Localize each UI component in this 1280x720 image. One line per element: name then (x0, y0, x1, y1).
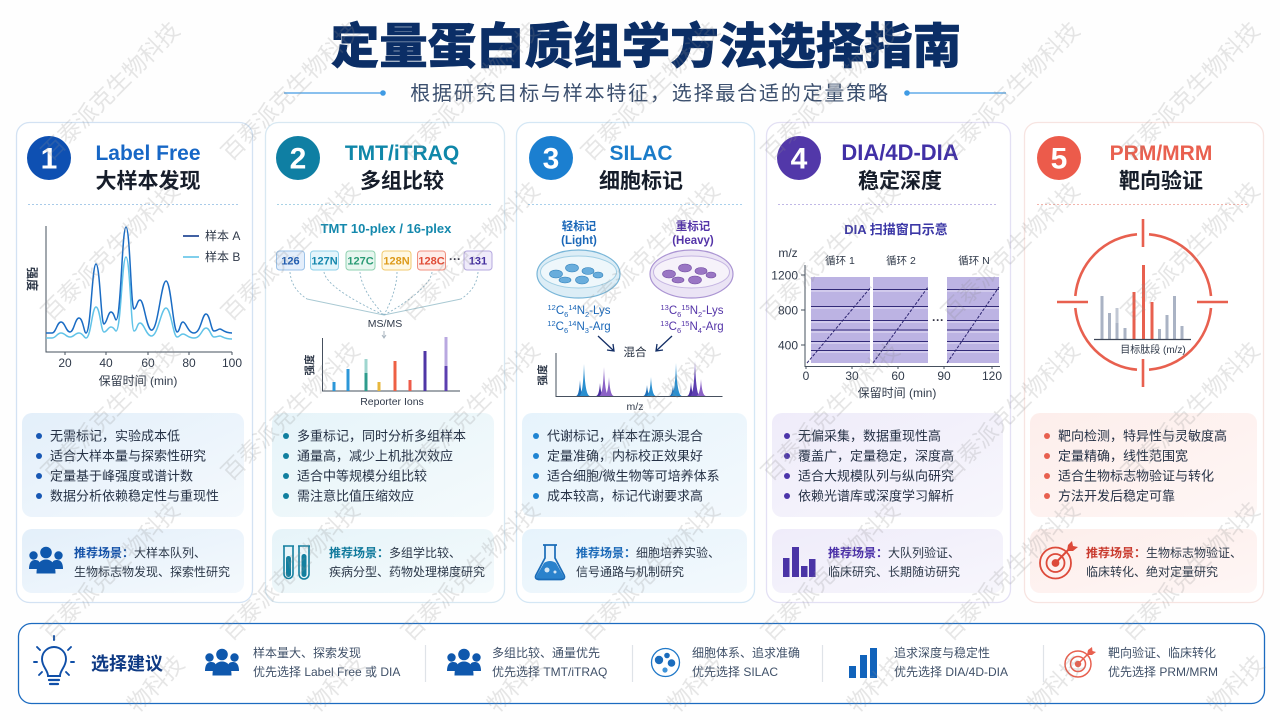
bullet list: 适合大规模队列与纵向研究 (798, 468, 954, 484)
recommended scenarios: 推荐场景：大样本队列、 (74, 545, 206, 560)
recommended scenarios (272, 529, 494, 593)
bullet list: 定量基于峰强度或谱计数 (50, 468, 193, 484)
bullet list: 无偏采集，数据重现性高 (798, 428, 941, 444)
diagram: TMT reporter channels: ··· (449, 252, 461, 266)
icon: target (1040, 541, 1078, 578)
chart: chromatogram (25, 226, 242, 388)
number badge 1 (27, 136, 71, 180)
chart: DIA scan windows: 循环 N (958, 254, 990, 267)
method focus: 稳定深度 (858, 169, 942, 193)
recommended scenarios: 推荐场景：多组学比较、 (329, 545, 461, 560)
chart: DIA scan windows: 循环 1 (825, 254, 855, 267)
advice 1 (205, 645, 400, 679)
panel: Label Free (16, 122, 252, 602)
bullet list: 数据分析依赖稳定性与重现性 (50, 488, 219, 504)
chart: DIA scan windows: 60 (891, 369, 905, 383)
advice 3: 细胞体系、追求准确 (692, 645, 800, 660)
bullet list: 无需标记，实验成本低 (50, 428, 180, 444)
diagram: SILAC labeling: 6 (564, 326, 568, 335)
diagram: SILAC labeling: N (576, 321, 585, 333)
bullet list (772, 413, 1003, 517)
diagram: TMT reporter channels (276, 221, 492, 408)
method name: DIA/4D-DIA (841, 140, 959, 165)
watermark layer: 百泰派克生物科技 (1116, 17, 1265, 166)
number badge 3 (529, 136, 573, 180)
advice 5: 靶向验证、临床转化 (1108, 645, 1216, 660)
bullet list: 依赖光谱库或深度学习解析 (798, 488, 954, 504)
watermark layer: 百泰派克生物科技 (936, 337, 1085, 486)
chart: chromatogram: 60 (141, 356, 155, 370)
recommended scenarios: 生物标志物发现、探索性研究 (74, 564, 230, 579)
diagram: SILAC labeling: 混合 (624, 345, 647, 359)
chart: chromatogram: 样本 B (205, 249, 240, 264)
advice 5 (1065, 645, 1218, 679)
watermark layer: 百泰派克生物科技 (756, 177, 905, 326)
bullet list: 需注意比值压缩效应 (297, 488, 414, 504)
chart: DIA scan windows: 保留时间 (min) (858, 386, 936, 400)
number badge 4 (777, 136, 821, 180)
diagram: SILAC labeling: 6 (677, 310, 681, 319)
number badge 5 (1037, 136, 1081, 180)
chart: DIA scan windows: ··· (932, 313, 944, 327)
recommended scenarios (22, 529, 244, 593)
chart: chromatogram: 80 (182, 356, 196, 370)
bullet list: 代谢标记，样本在源头混合 (547, 428, 703, 444)
recommended scenarios: 推荐场景：细胞培养实验、 (576, 545, 720, 560)
advice 4 (849, 645, 1008, 679)
advice 2 (447, 645, 607, 679)
diagram: target spectrum (1057, 219, 1228, 387)
bullet list: 适合细胞/微生物等可培养体系 (547, 468, 720, 484)
chart: DIA scan windows: 循环 2 (886, 254, 916, 267)
watermark layer: 百泰派克生物科技 (576, 497, 725, 646)
watermark layer: 百泰派克生物科技 (936, 177, 1085, 326)
icon: bars (783, 547, 816, 577)
bullet list (272, 413, 494, 517)
icon: people (29, 547, 63, 574)
method focus: 多组比较 (360, 169, 444, 193)
bullet list: 适合生物标志物验证与转化 (1058, 468, 1214, 484)
method name: Label Free (95, 142, 201, 165)
watermark layer: 百泰派克生物科技 (576, 337, 725, 486)
watermark layer: 百泰派克生物科技 (36, 177, 185, 326)
diagram: TMT reporter channels: 126 (281, 256, 300, 268)
bullet list: 定量精确，线性范围宽 (1058, 448, 1188, 464)
diagram: SILAC labeling: C (556, 305, 564, 317)
watermark layer: 百泰派克生物科技 (756, 337, 905, 486)
recommended scenarios: 疾病分型、药物处理梯度研究 (329, 564, 485, 579)
advice 2: 优先选择 TMT/iTRAQ (492, 665, 607, 679)
watermark layer: 百泰派克生物科技 (36, 497, 185, 646)
recommended scenarios: 推荐场景：生物标志物验证、 (1086, 545, 1242, 560)
diagram: SILAC labeling: 6 (564, 310, 568, 319)
watermark layer: 物科技 (662, 650, 729, 718)
chart: DIA scan windows: 0 (803, 369, 810, 383)
bullet list: 靶向检测，特异性与灵敏度高 (1058, 428, 1227, 444)
bullet list: 通量高，减少上机批次效应 (297, 448, 453, 464)
diagram: TMT reporter channels: 131 (469, 256, 487, 268)
watermark layer: 物科技 (1022, 650, 1089, 718)
diagram: SILAC labeling: N (690, 305, 698, 317)
diagram: SILAC labeling: 6 (677, 326, 681, 335)
diagram: SILAC labeling: -Lys (702, 305, 724, 317)
number badge 1: 1 (41, 142, 57, 176)
diagram: SILAC labeling: 14 (568, 319, 576, 328)
arrow: mix left (598, 336, 614, 351)
panel: selection advice (18, 624, 1264, 704)
watermark layer: 物科技 (122, 650, 189, 718)
icon: test tubes (283, 546, 310, 579)
bullet list: 适合大样本量与探索性研究 (50, 448, 206, 464)
watermark layer: 百泰派克生物科技 (36, 17, 185, 166)
icon: heavy dish (650, 250, 733, 298)
chart: chromatogram: 20 (58, 356, 72, 370)
chart: chromatogram: 40 (99, 356, 113, 370)
chart: DIA scan windows: DIA 扫描窗口示意 (844, 222, 948, 237)
chart: DIA scan windows: 1200 (771, 268, 798, 282)
chart: DIA scan windows (771, 222, 1002, 400)
bullet list: 覆盖广，定量稳定，深度高 (798, 448, 954, 464)
recommended scenarios (522, 529, 747, 593)
bullet list (522, 413, 747, 517)
advice heading: 选择建议 (91, 654, 163, 674)
diagram: TMT reporter channels: TMT 10-plex / 16-plex (321, 221, 452, 236)
number badge 3: 3 (543, 142, 559, 176)
diagram: SILAC labeling: 2 (698, 310, 702, 319)
diagram: SILAC labeling: 4 (698, 326, 702, 335)
recommended scenarios: 临床转化、绝对定量研究 (1086, 564, 1218, 579)
watermark layer: 百泰派克生物科技 (576, 177, 725, 326)
diagram: SILAC labeling: -Lys (589, 305, 611, 317)
advice 4: 追求深度与稳定性 (894, 645, 990, 660)
watermark layer: 百泰派克生物科技 (396, 177, 545, 326)
watermark layer: 百泰派克生物科技 (36, 337, 185, 486)
diagram: SILAC labeling: 2 (585, 310, 589, 319)
watermark layer: 百泰派克生物科技 (576, 17, 725, 166)
diagram: SILAC labeling: 重标记 (676, 219, 711, 233)
watermark layer: 物科技 (302, 650, 369, 718)
bullet list: 定量准确，内标校正效果好 (547, 448, 703, 464)
method name: PRM/MRM (1110, 142, 1212, 165)
bullet list: 方法开发后稳定可靠 (1058, 488, 1175, 504)
diagram: SILAC labeling: 13 (661, 303, 669, 312)
diagram: SILAC labeling: (Heavy) (672, 235, 714, 247)
chart: DIA scan windows: 120 (982, 369, 1002, 383)
recommended scenarios (772, 529, 1003, 593)
recommended scenarios: 临床研究、长期随访研究 (828, 564, 960, 579)
diagram: TMT reporter channels: MS/MS (368, 318, 402, 330)
diagram: SILAC labeling: m/z (627, 401, 643, 413)
title: 定量蛋白质组学方法选择指南 (331, 19, 961, 74)
recommended scenarios (1030, 529, 1257, 593)
diagram: SILAC labeling: 14 (568, 303, 577, 312)
diagram: SILAC labeling: C (556, 321, 564, 333)
number badge 4: 4 (791, 142, 808, 176)
watermark layer: 物科技 (842, 650, 909, 718)
watermark layer: 百泰派克生物科技 (216, 17, 365, 166)
subtitle ornament: left (284, 90, 386, 96)
diagram: SILAC labeling: C (669, 321, 677, 333)
number badge 5: 5 (1051, 142, 1067, 176)
recommended scenarios: 推荐场景：大队列验证、 (828, 545, 960, 560)
watermark layer: 百泰派克生物科技 (756, 17, 905, 166)
arrow: mix right (656, 336, 672, 351)
method name: TMT/iTRAQ (345, 142, 459, 165)
chart: chromatogram: 样本 A (205, 228, 240, 243)
watermark layer: 物科技 (482, 650, 549, 718)
chart: chromatogram: 保留时间 (min) (99, 374, 177, 388)
watermark layer: 百泰派克生物科技 (216, 337, 365, 486)
chart: chromatogram: 强度 (25, 267, 40, 291)
watermark layer: 百泰派克生物科技 (396, 17, 545, 166)
advice 2: 多组比较、通量优先 (492, 645, 600, 660)
bullet list: 适合中等规模分组比较 (297, 468, 427, 484)
panel: SILAC (516, 122, 754, 602)
number badge 2: 2 (290, 142, 306, 176)
method name: SILAC (610, 142, 672, 165)
chart: DIA scan windows: 30 (845, 369, 859, 383)
subtitle ornament: right (904, 90, 1006, 96)
diagram: SILAC labeling: 轻标记 (562, 219, 597, 233)
watermark layer: 百泰派克生物科技 (396, 497, 545, 646)
diagram: TMT reporter channels: 127N (311, 256, 338, 268)
diagram: TMT reporter channels: 128C (418, 256, 445, 268)
icon: light dish (537, 250, 620, 298)
icon: light bulb (34, 636, 74, 684)
advice 3: 优先选择 SILAC (692, 665, 778, 679)
diagram: TMT reporter channels: Reporter Ions (360, 396, 424, 408)
diagram: TMT reporter channels: 128N (383, 256, 410, 268)
diagram: SILAC labeling: 15 (681, 319, 689, 328)
method focus: 大样本发现 (96, 170, 200, 193)
diagram: SILAC labeling: N (577, 305, 585, 317)
diagram: SILAC labeling: 强度 (536, 364, 549, 386)
diagram: SILAC labeling: N (689, 321, 698, 333)
watermark layer: 百泰派克生物科技 (396, 337, 545, 486)
bullet list (22, 413, 244, 517)
chart: chromatogram: 100 (222, 356, 242, 370)
chart: DIA scan windows: m/z (778, 246, 798, 260)
diagram: SILAC labeling: 12 (548, 303, 556, 312)
advice 1: 优先选择 Label Free 或 DIA (253, 665, 400, 679)
diagram: TMT reporter channels: 127C (347, 256, 374, 268)
watermark layer: 百泰派克生物科技 (216, 177, 365, 326)
diagram: SILAC labeling: -Arg (702, 321, 724, 333)
icon: flask (536, 545, 564, 580)
diagram: target spectrum: 目标肽段 (m/z) (1120, 343, 1186, 356)
diagram: SILAC labeling: 12 (547, 319, 556, 328)
chart: DIA scan windows: 90 (937, 369, 951, 383)
advice 1: 样本量大、探索发现 (253, 645, 361, 660)
watermark layer: 百泰派克生物科技 (936, 17, 1085, 166)
bullet list (1030, 413, 1257, 517)
recommended scenarios: 信号通路与机制研究 (576, 564, 684, 579)
bullet list: 多重标记，同时分析多组样本 (297, 428, 466, 444)
diagram: SILAC labeling: -Arg (589, 321, 611, 333)
chart: DIA scan windows: 800 (778, 304, 798, 318)
method focus: 细胞标记 (599, 170, 683, 193)
advice 5: 优先选择 PRM/MRM (1108, 665, 1218, 679)
diagram: TMT reporter channels: 强度 (303, 354, 316, 376)
advice 4: 优先选择 DIA/4D-DIA (894, 665, 1008, 679)
watermark layer: 物科技 (1202, 650, 1269, 718)
subtitle: 根据研究目标与样本特征，选择最合适的定量策略 (410, 82, 890, 105)
panel: TMT/iTRAQ (266, 122, 504, 602)
watermark layer: 百泰派克生物科技 (936, 497, 1085, 646)
number badge 2 (276, 136, 320, 180)
watermark layer: 百泰派克生物科技 (1116, 497, 1265, 646)
watermark layer: 百泰派克生物科技 (1116, 177, 1265, 326)
diagram: SILAC labeling: C (669, 305, 677, 317)
bullet list: 成本较高，标记代谢要求高 (547, 488, 703, 504)
watermark layer: 百泰派克生物科技 (1116, 337, 1265, 486)
diagram: SILAC labeling: (Light) (561, 235, 597, 247)
diagram: SILAC labeling (536, 219, 733, 413)
method focus: 靶向验证 (1119, 169, 1203, 193)
chart: DIA scan windows: 400 (778, 338, 798, 352)
panel: DIA/4D-DIA (766, 122, 1010, 602)
diagram: SILAC labeling: 15 (681, 303, 690, 312)
diagram: SILAC labeling: 3 (585, 326, 589, 335)
advice 3 (652, 645, 800, 679)
watermark layer: 百泰派克生物科技 (216, 497, 365, 646)
panel: PRM/MRM (1024, 122, 1264, 602)
diagram: SILAC labeling: 13 (660, 319, 669, 328)
watermark layer: 百泰派克生物科技 (756, 497, 905, 646)
